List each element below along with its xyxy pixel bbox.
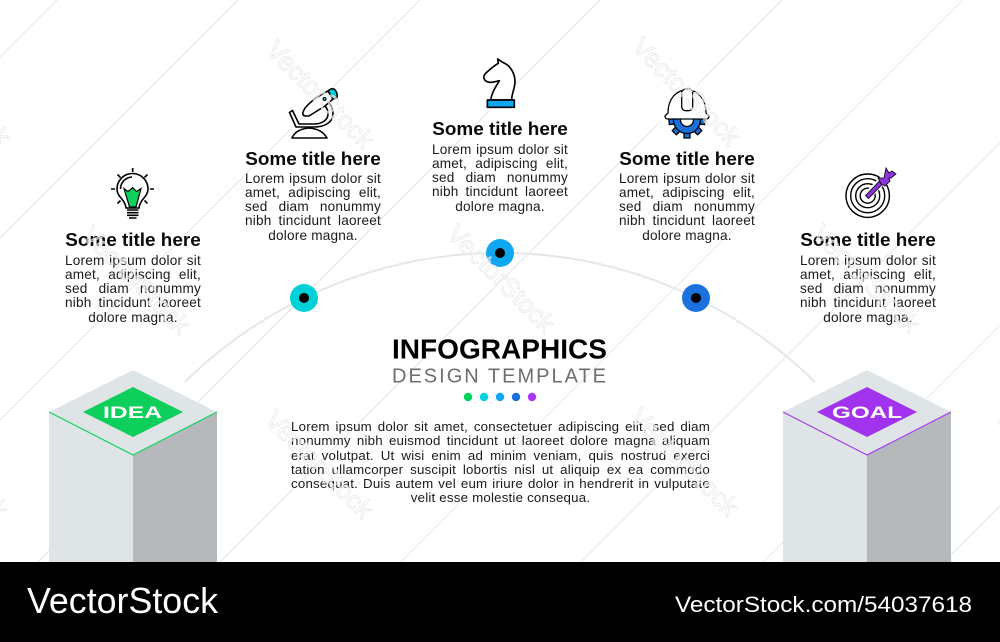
watermark: VectorStock — [76, 220, 197, 340]
text: step 5: Lorem ipsum dolor sit — [800, 253, 936, 268]
panel: step 4 — [619, 88, 755, 243]
watermark: VectorStock — [441, 219, 562, 339]
pillar: goal: GOAL — [832, 404, 902, 422]
text: step 1: amet, adipiscing elit, — [65, 267, 201, 282]
pillar: idea — [49, 370, 217, 562]
text: description — [291, 419, 710, 505]
watermark: VectorStock — [626, 32, 747, 152]
panel: step 1 — [65, 168, 201, 325]
title: INFOGRAPHICS — [392, 333, 607, 364]
title: DESIGN TEMPLATE — [392, 366, 606, 388]
text: description: tation ullamcorper suscipit lobortis nisl ut aliquip ex ea commodo — [291, 462, 710, 477]
text: step 5: nibh tincidunt laoreet — [800, 295, 936, 310]
text: step 5 — [800, 253, 936, 325]
heading: step 1: Some title here — [65, 230, 201, 251]
icon: microscope — [288, 88, 338, 139]
text: description: Lorem ipsum dolor sit amet, consectetuer adipiscing elit, sed diam — [291, 419, 710, 434]
text: step 1: nibh tincidunt laoreet — [65, 295, 201, 310]
panel: step 5 — [800, 167, 936, 325]
text: step 1: Lorem ipsum dolor sit — [65, 253, 201, 268]
text: step 2 — [245, 171, 381, 243]
text: description: nonummy nibh euismod tincidunt ut laoreet dolore magna aliquam — [291, 433, 710, 448]
text: step 4 — [619, 171, 755, 243]
heading: step 2: Some title here — [245, 149, 381, 170]
text: step 4: dolore magna. — [642, 228, 732, 243]
text: step 3: nibh tincidunt laoreet — [432, 184, 568, 199]
text: step 1 — [65, 253, 201, 325]
title — [392, 333, 607, 388]
text: step 5: dolore magna. — [823, 310, 913, 325]
text: step 4: Lorem ipsum dolor sit — [619, 171, 755, 186]
icon: chess knight — [482, 58, 516, 108]
node: centre timeline marker — [486, 239, 514, 267]
heading: step 4: Some title here — [619, 149, 755, 170]
text: step 3 — [432, 142, 568, 214]
node: right timeline marker — [682, 284, 710, 312]
text: step 5: amet, adipiscing elit, — [800, 267, 936, 282]
text: step 1: dolore magna. — [88, 310, 178, 325]
heading: step 5: Some title here — [800, 230, 936, 251]
text: description: erat volutpat. Ut wisi enim ad minim veniam, quis nostrud exerci — [291, 448, 710, 462]
watermark: VectorStock — [624, 402, 745, 522]
text: step 2: nibh tincidunt laoreet — [245, 213, 381, 228]
heading: step 3: Some title here — [432, 119, 568, 140]
watermark: VectorStock — [259, 405, 380, 525]
text: step 4: amet, adipiscing elit, — [619, 185, 755, 200]
text: step 2: dolore magna. — [268, 228, 358, 243]
text: step 4: sed diam nonummy — [619, 199, 755, 214]
arc connector — [184, 252, 816, 382]
footer band: VectorStock — [27, 580, 219, 621]
icon: light bulb — [111, 168, 154, 219]
text: step 2: Lorem ipsum dolor sit — [245, 171, 381, 186]
panel: step 2 — [245, 88, 381, 243]
text: step 3: sed diam nonummy — [432, 170, 568, 185]
icon: target with arrow — [845, 167, 896, 218]
text: step 4: nibh tincidunt laoreet — [619, 213, 755, 228]
footer band: VectorStock.com/54037618 — [675, 592, 972, 617]
text: step 3: dolore magna. — [455, 198, 545, 214]
panel: step 3 — [432, 58, 568, 214]
pillar: goal — [783, 370, 951, 562]
text: description: velit esse molestie consequa. — [411, 490, 590, 505]
node: left timeline marker — [290, 284, 318, 312]
watermark: VectorStock — [260, 35, 381, 155]
text: step 2: sed diam nonummy — [245, 199, 381, 214]
text: step 2: amet, adipiscing elit, — [245, 185, 381, 200]
footer band — [0, 562, 1000, 642]
text: description: consequat. Duis autem vel eum iriure dolor in hendrerit in vulputate — [291, 476, 710, 491]
text: step 3: amet, adipiscing elit, — [432, 156, 568, 171]
icon: helmet and gear — [664, 88, 710, 139]
text: step 1: sed diam nonummy — [65, 281, 201, 296]
text: step 3: Lorem ipsum dolor sit — [432, 142, 568, 156]
colour dots — [464, 392, 536, 402]
text: step 5: sed diam nonummy — [800, 281, 936, 296]
watermark: VectorStock — [806, 219, 927, 339]
pillar: idea: IDEA — [103, 404, 162, 422]
